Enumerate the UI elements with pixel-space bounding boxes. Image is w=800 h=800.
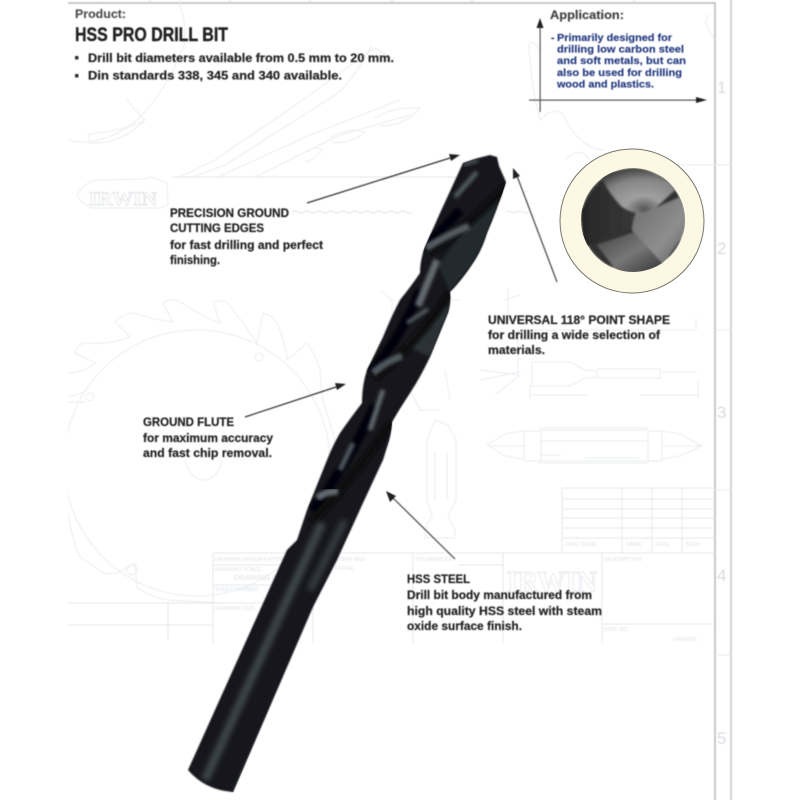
application text: also be used for drilling xyxy=(557,67,682,79)
callout arrow: HSS steel xyxy=(386,491,455,559)
callout: precision ground cutting edges: for fast drilling and perfect xyxy=(170,240,323,252)
background technical drawings xyxy=(64,0,715,643)
callout: ground flute: for maximum accuracy xyxy=(143,433,274,445)
application text xyxy=(550,8,686,90)
heading: product xyxy=(75,7,228,46)
callout: universal point shape: for drilling a wide selection of xyxy=(488,330,660,342)
callout: HSS steel: high quality HSS steel with steam xyxy=(407,606,602,618)
callout: universal point shape xyxy=(488,315,670,357)
heading: product: Product: xyxy=(75,7,126,21)
frame grid numbers: 3 xyxy=(717,403,726,422)
callout: ground flute xyxy=(143,417,274,460)
drawing: jigsaw blade with IRWIN handle: IRWIN xyxy=(89,189,157,210)
drawing: title block: SHEET NUMBER xyxy=(215,587,259,593)
frame grid numbers: 1 xyxy=(717,78,726,97)
callout: HSS steel xyxy=(407,574,602,633)
callout: universal point shape: UNIVERSAL 118° POINT SHAPE xyxy=(488,315,670,327)
callout: HSS steel: oxide surface finish. xyxy=(407,621,522,633)
drawing: title block: DRAWING S xyxy=(234,573,277,582)
application text: wood and plastics. xyxy=(556,78,654,90)
drawing: title block: NAME xyxy=(626,542,642,548)
drawing: small dimension details xyxy=(380,288,530,410)
drawing: saw blade xyxy=(64,300,340,603)
drawing: title block: DRR0001 xyxy=(673,637,697,643)
frame grid numbers: 4 xyxy=(717,566,726,585)
callout: precision ground cutting edges: PRECISION GROUND xyxy=(170,208,289,220)
callout: precision ground cutting edges: finishing. xyxy=(170,255,220,267)
drawing: spade bit xyxy=(480,318,698,398)
drawing: title block xyxy=(68,488,715,643)
application text: drilling low carbon steel xyxy=(557,44,684,56)
heading: product: HSS PRO DRILL BIT xyxy=(75,25,228,46)
drawing: title block: TOLERANCES xyxy=(415,557,453,563)
drawing: curved hand tool xyxy=(68,0,185,142)
drawing: title block: DESCRIPTION xyxy=(604,557,642,563)
frame grid numbers: 2 xyxy=(717,239,726,258)
application panel xyxy=(529,8,707,112)
application text: Application: xyxy=(550,8,624,22)
drawing: title block: IRWIN xyxy=(507,564,597,599)
product bullet list xyxy=(75,53,394,82)
application text: Primarily designed for xyxy=(557,32,672,44)
drawing: title block: STARY AND xyxy=(335,557,366,563)
drawing: top right tool outline xyxy=(529,15,715,165)
callout arrow: point shape xyxy=(513,168,557,282)
drawing: jigsaw blade with IRWIN handle xyxy=(77,177,529,213)
drawing: title block: DRAWING SPECIFICATION xyxy=(215,557,285,563)
callout arrow: ground flute xyxy=(245,383,346,417)
callout: precision ground cutting edges xyxy=(170,208,323,267)
callout: ground flute: GROUND FLUTE xyxy=(143,417,234,429)
drawing: title block: DWG ISSUE xyxy=(565,542,597,548)
application axes arrows xyxy=(529,18,707,112)
product bullet list: Din standards 338, 345 and 340 available. xyxy=(88,70,342,82)
drawing: drill bits fan xyxy=(180,45,420,178)
product bullet list: Drill bit diameters available from 0.5 mm to 20 mm. xyxy=(88,53,394,65)
drawing: title block: DRAWING SCALE xyxy=(215,567,261,573)
callout: HSS steel: Drill bit body manufactured from xyxy=(407,590,592,602)
drawing: title block: DATE xyxy=(655,542,670,548)
callout arrow: cutting edges xyxy=(307,154,460,203)
callout: HSS steel: HSS STEEL xyxy=(407,574,470,586)
drill bit xyxy=(188,155,508,800)
drawing: title block: ENTIAL xyxy=(335,566,354,572)
callout: ground flute: and fast chip removal. xyxy=(143,448,272,460)
detail circle: drill point close-up xyxy=(560,149,704,293)
frame grid numbers: 5 xyxy=(717,729,726,748)
frame grid numbers xyxy=(717,78,726,748)
callout: precision ground cutting edges: CUTTING EDGES xyxy=(170,223,264,235)
application text: - xyxy=(551,32,555,44)
drawing: title block: DRAWING SIZE xyxy=(215,606,255,612)
application text: and soft metals, but can xyxy=(557,55,686,67)
drawing: title block: SIGN xyxy=(686,542,699,548)
drawing: double-ended screwdriver bit xyxy=(487,428,702,463)
callout: universal point shape: materials. xyxy=(488,345,545,357)
drawing: tall screwdriver bit xyxy=(425,420,456,538)
drawing: title block: DWG NO xyxy=(604,627,628,633)
